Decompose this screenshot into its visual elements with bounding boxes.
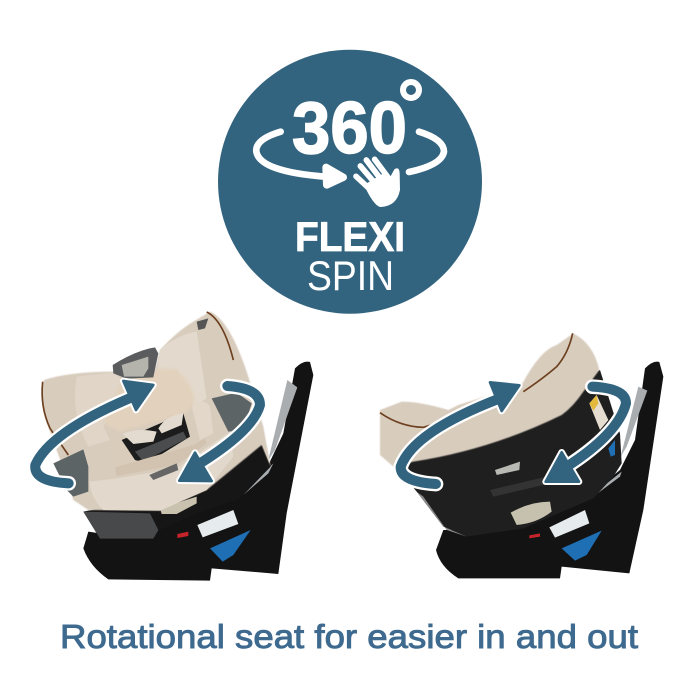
seat shell [393,370,622,537]
seat shell [83,443,271,539]
badge: 360 flexi spin [218,50,482,314]
arrow: rotating toward the top [35,381,153,483]
icon: rotation arrow and hand [256,132,444,207]
icon: degree symbol [403,82,419,98]
headrest handle [113,347,158,379]
arrow: rotating toward the top [401,382,519,484]
badge circle [218,50,482,314]
seat cushion [380,333,599,467]
heading: 360: 360 [292,88,407,169]
heading: FLEXI: FLEXI [295,213,405,260]
arrow: rotating toward the bottom [546,387,626,482]
car seat: rear view with rotation arrows [380,333,663,578]
seat cushion [42,312,271,511]
side grips [53,393,252,497]
heading: SPIN: SPIN [307,252,394,299]
caption: Rotational seat for easier in and out [60,618,638,655]
harness [110,402,213,480]
car seat: front view with rotation arrows [35,312,313,581]
seat base [436,362,663,578]
arrow: rotating toward the bottom [179,386,260,481]
seat base [83,362,313,581]
